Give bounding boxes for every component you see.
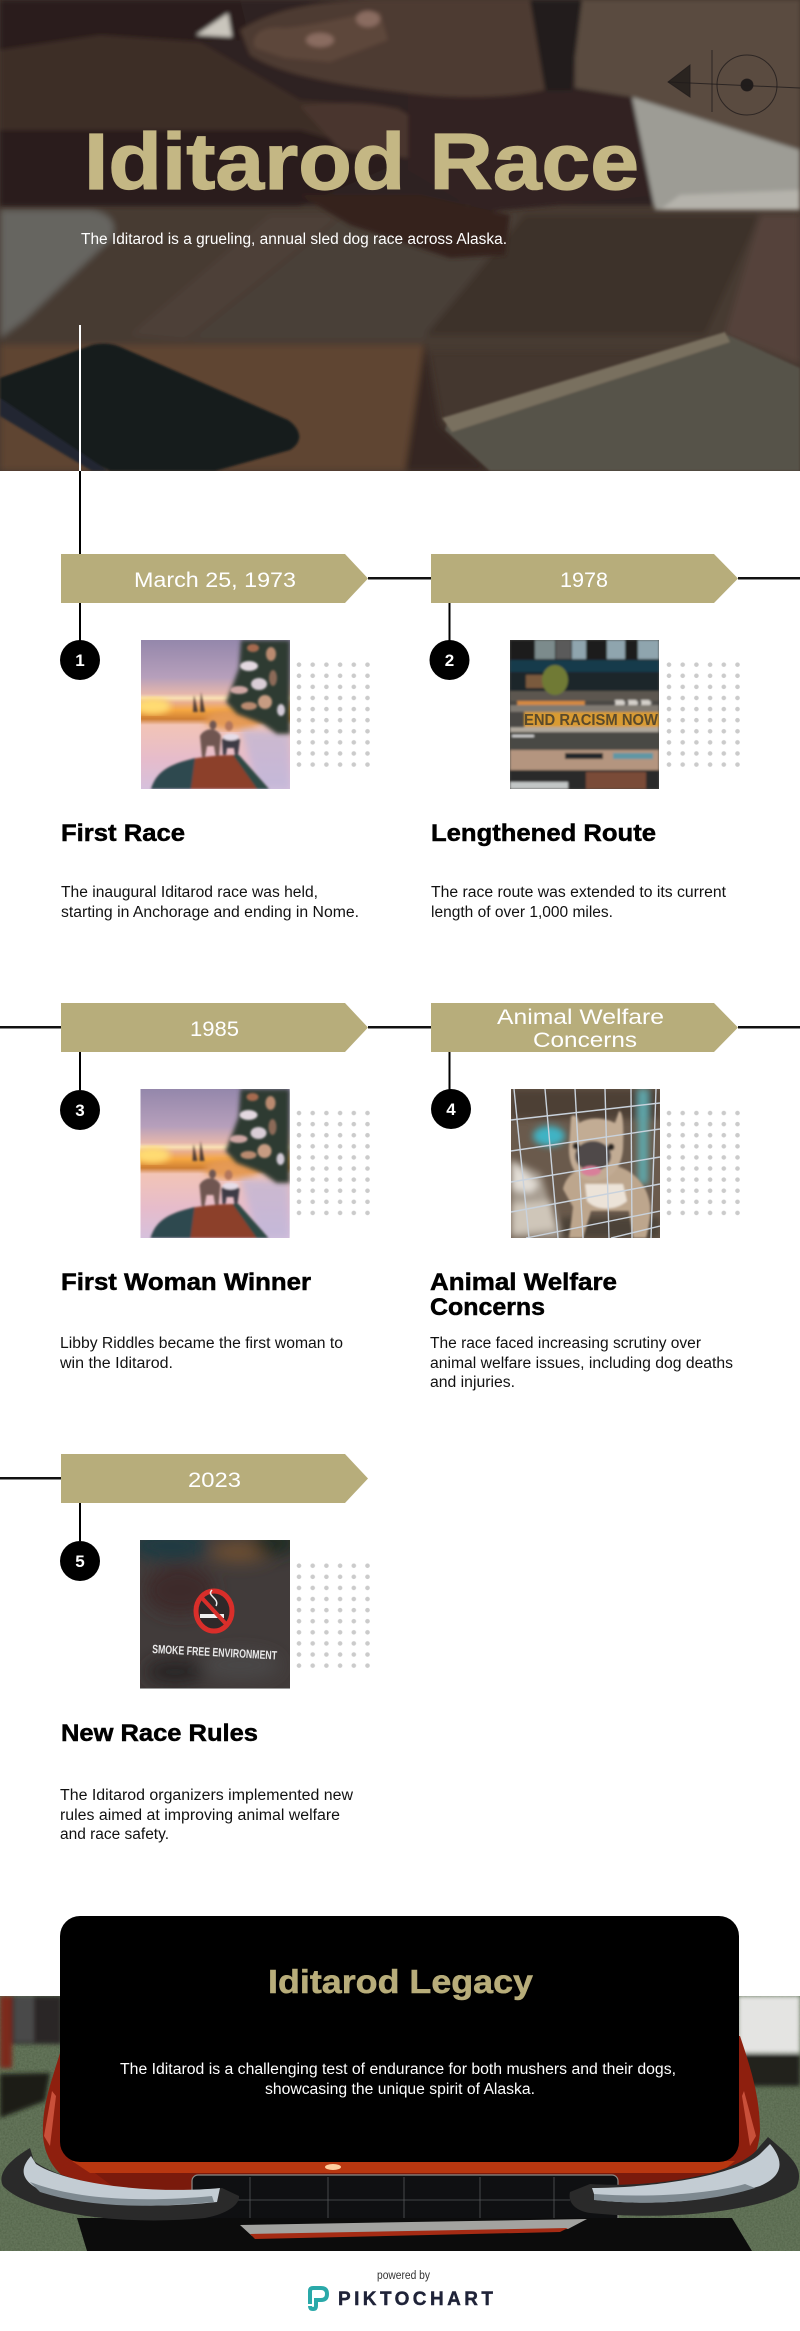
panel: event 1 xyxy=(60,554,431,921)
subtitle: The Iditarod is a grueling, annual sled dog race across Alaska. xyxy=(81,231,507,248)
topic banner arrow: Animal Welfare xyxy=(497,1006,664,1029)
description: The Iditarod organizers implemented new xyxy=(60,1787,354,1804)
panel: event 3 xyxy=(0,1003,431,1372)
number badge xyxy=(431,1089,471,1129)
heading xyxy=(430,1269,617,1321)
panel: event 4 xyxy=(430,1003,800,1391)
photo: sled dogs at sunset xyxy=(135,640,290,789)
hero background photo of clasped hands on a table xyxy=(0,0,800,471)
photo: sled dogs at sunset xyxy=(134,1089,290,1238)
connector lines xyxy=(448,577,800,641)
legacy description xyxy=(120,2061,676,2098)
dot grid decoration xyxy=(292,1108,374,1218)
Piktochart logo footer xyxy=(310,2270,493,2310)
description xyxy=(61,884,359,921)
topic banner arrow: Concerns xyxy=(533,1029,637,1052)
panel: hero header xyxy=(0,0,800,471)
timeline start line, white over hero and black below xyxy=(79,325,81,554)
connector lines xyxy=(448,1026,800,1090)
panel: event 5 xyxy=(0,1454,374,1843)
dot grid decoration xyxy=(662,1108,744,1218)
icon: Piktochart mark xyxy=(310,2288,327,2309)
description: and race safety. xyxy=(60,1826,169,1843)
photo: smoke free sign xyxy=(140,1540,290,1689)
date banner arrow xyxy=(61,1454,368,1503)
description: rules aimed at improving animal welfare xyxy=(60,1807,340,1824)
date banner arrow: 1978 xyxy=(560,569,608,592)
description: and injuries. xyxy=(430,1374,515,1391)
dot grid decoration xyxy=(292,659,374,770)
black legacy card xyxy=(60,1916,739,2162)
date banner arrow: 1985 xyxy=(190,1018,239,1041)
photo: street mural from above xyxy=(510,640,659,789)
description: The inaugural Iditarod race was held, xyxy=(61,884,318,901)
description xyxy=(60,1787,354,1843)
heading: Concerns xyxy=(430,1294,545,1321)
panel: legacy footer section xyxy=(0,1916,800,2251)
heading: New Race Rules xyxy=(61,1720,258,1747)
panel: event 2 xyxy=(430,554,800,921)
dot grid decoration xyxy=(292,1560,374,1671)
description: Libby Riddles became the first woman to xyxy=(60,1335,343,1352)
number badge: 2 xyxy=(445,651,454,670)
number badge: 5 xyxy=(75,1552,85,1571)
date banner arrow xyxy=(61,554,368,603)
background photo of a red classic car on grass xyxy=(0,1996,800,2251)
connector lines xyxy=(0,1026,431,1090)
number badge: 4 xyxy=(446,1100,456,1119)
number badge xyxy=(60,640,100,680)
number badge: 3 xyxy=(75,1101,85,1120)
dot grid decoration xyxy=(662,659,744,770)
heading: First Woman Winner xyxy=(61,1269,311,1296)
powered by label: powered by xyxy=(377,2270,430,2282)
date banner arrow xyxy=(431,554,738,603)
heading: Lengthened Route xyxy=(431,820,656,847)
description: length of over 1,000 miles. xyxy=(431,904,613,921)
title: Iditarod Race xyxy=(84,117,639,206)
date banner arrow xyxy=(61,1003,368,1052)
description: The race faced increasing scrutiny over xyxy=(430,1335,701,1352)
date banner arrow: March 25, 1973 xyxy=(134,569,296,592)
legacy description: showcasing the unique spirit of Alaska. xyxy=(265,2081,535,2098)
heading: Animal Welfare xyxy=(430,1269,617,1296)
legacy description: The Iditarod is a challenging test of endurance for both mushers and their dogs, xyxy=(120,2061,676,2078)
number badge xyxy=(430,640,470,680)
description: The race route was extended to its current xyxy=(431,884,727,901)
legacy heading: Iditarod Legacy xyxy=(268,1963,534,2000)
description xyxy=(59,1335,343,1372)
description: animal welfare issues, including dog deaths xyxy=(430,1355,733,1372)
wordmark: PIKTOCHART xyxy=(338,2289,493,2310)
number badge xyxy=(60,1090,100,1130)
heading: First Race xyxy=(61,820,185,847)
connector lines xyxy=(0,1477,81,1541)
description xyxy=(431,884,727,921)
photo: caged bulldog xyxy=(511,1089,660,1238)
date banner arrow: 2023 xyxy=(188,1469,241,1492)
description: starting in Anchorage and ending in Nome. xyxy=(61,904,359,921)
description xyxy=(430,1335,733,1391)
connector lines xyxy=(79,577,431,641)
number badge: 1 xyxy=(75,651,85,670)
number badge xyxy=(60,1541,100,1581)
topic banner arrow xyxy=(431,1003,738,1052)
description: win the Iditarod. xyxy=(59,1355,173,1372)
